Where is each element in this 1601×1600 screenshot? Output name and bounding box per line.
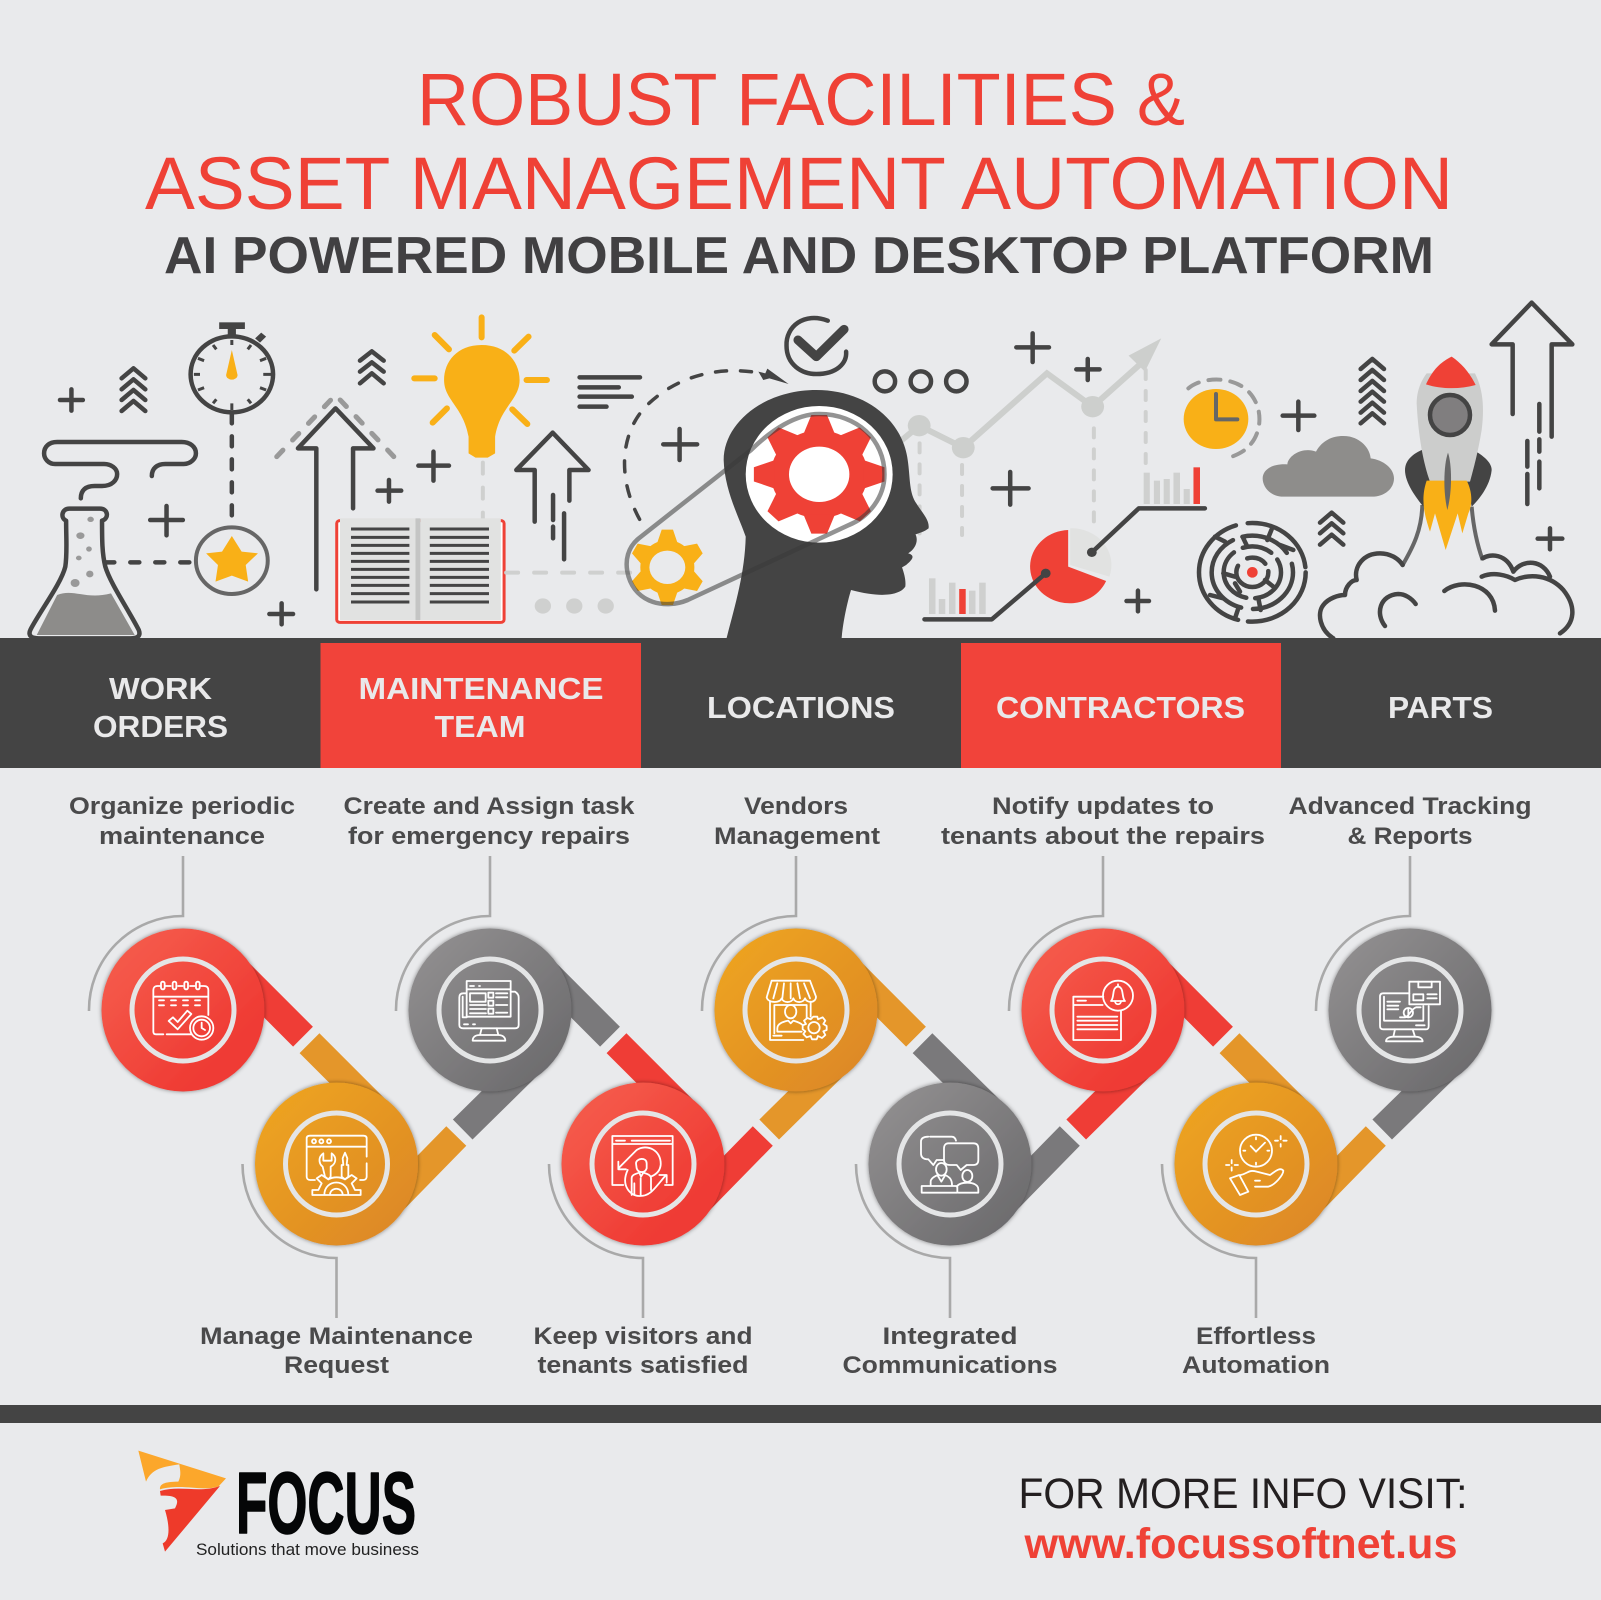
icon: head silhouette (724, 390, 929, 638)
label: manage maintenance request: Request (284, 1352, 389, 1379)
footer divider (0, 1405, 1601, 1423)
band label: work orders (93, 671, 228, 744)
website link: www.focussoftnet.us (1023, 1520, 1458, 1568)
circle: integrated communications (868, 1082, 1032, 1246)
red tab: contractors (961, 643, 1281, 768)
icon: star badge (196, 527, 268, 594)
label: manage maintenance request: Manage Maintenance (200, 1323, 473, 1350)
title (145, 58, 1453, 225)
icon: brain gear (746, 406, 893, 543)
circle: create and assign task (408, 928, 572, 1092)
band label: maintenance team: MAINTENANCE (358, 671, 604, 706)
icon: conversation (921, 1137, 978, 1193)
label: organize periodic maintenance: maintenance (99, 823, 265, 850)
bottom labels (200, 1323, 1330, 1379)
label: advanced tracking: Advanced Tracking (1288, 793, 1532, 820)
band label: locations: LOCATIONS (707, 690, 895, 725)
band label: contractors: CONTRACTORS (996, 690, 1245, 725)
circle: vendors management (714, 928, 878, 1092)
label: integrated communications (842, 1323, 1058, 1379)
band label: parts: PARTS (1388, 690, 1493, 725)
icon: window with tools (307, 1136, 367, 1195)
title: ROBUST FACILITIES & (417, 58, 1185, 141)
label: effortless automation: Automation (1182, 1352, 1330, 1379)
label: manage maintenance request (200, 1323, 473, 1379)
icon: monitor dashboard (459, 981, 519, 1041)
icon: clock (1184, 380, 1259, 459)
top labels (69, 793, 1532, 850)
label: advanced tracking: & Reports (1348, 823, 1472, 850)
icon: rocket (1403, 357, 1492, 565)
icon: plus and chevrons right (1283, 359, 1562, 549)
circle: keep visitors (562, 1082, 724, 1246)
dashed connector: stopwatch to star (230, 413, 234, 520)
icon: cloud (1263, 436, 1394, 497)
chart: right bars (1087, 467, 1205, 557)
band label: work orders: WORK (109, 671, 213, 706)
illustration: centre part (625, 318, 1205, 638)
icon: gear small yellow (630, 530, 705, 605)
chart: pie (1030, 528, 1111, 603)
illustration: right part (1184, 303, 1572, 638)
call to action: FOR MORE INFO VISIT: (1018, 1470, 1468, 1518)
label: integrated communications: Communications (842, 1352, 1058, 1379)
icon: open book (337, 518, 504, 622)
dashed connector: bulb to book (481, 463, 485, 520)
arrow: dashed curve to head (625, 369, 789, 519)
guide arcs (89, 856, 1410, 1318)
label: effortless automation: Effortless (1196, 1323, 1316, 1350)
band label: work orders: ORDERS (93, 709, 228, 744)
band label: maintenance team (358, 671, 604, 744)
red tab: maintenance team (320, 643, 641, 768)
circle: advanced tracking (1328, 928, 1492, 1092)
icon: person with cycle arrows (612, 1136, 673, 1196)
icon: monitor with package (1380, 982, 1440, 1041)
arrow: big up right (1492, 303, 1572, 504)
label: organize periodic maintenance (69, 793, 295, 850)
dashed connector: flask to star (105, 560, 200, 565)
icon: flask with tube (30, 442, 196, 638)
icon: check circle (787, 318, 846, 374)
icons column three four five (612, 981, 978, 1196)
icon: store with vendor (767, 981, 827, 1040)
icon: stopwatch (191, 322, 273, 412)
icon: hand with clock (1226, 1135, 1287, 1195)
label: notify updates: Notify updates to (992, 793, 1214, 820)
subtitle: AI POWERED MOBILE AND DESKTOP PLATFORM (164, 227, 1434, 285)
label: notify updates (941, 793, 1265, 850)
icon: text lines (580, 377, 640, 407)
icons column one and two (153, 981, 519, 1195)
chart: rising trend line (900, 338, 1161, 535)
label: vendors management: Vendors (744, 793, 848, 820)
connector strips (230, 963, 1457, 1211)
label: organize periodic maintenance: Organize periodic (69, 793, 295, 820)
label: create and assign task: Create and Assign task (344, 793, 635, 820)
icon: calendar (153, 982, 213, 1040)
arrow: up small (516, 433, 589, 559)
icon: smoke cloud outline (1320, 553, 1572, 638)
label: keep visitors: tenants satisfied (538, 1352, 748, 1379)
band label: maintenance team: TEAM (434, 709, 526, 744)
arrow: up with dashed chevron (277, 395, 394, 589)
circle: organize periodic maintenance (102, 928, 264, 1092)
logo tagline: Solutions that move business (196, 1540, 419, 1559)
icon: plus signs centre (663, 333, 1149, 611)
belt connecting gears (627, 414, 884, 604)
chart: left bars (924, 569, 1051, 619)
logo (138, 1451, 419, 1559)
label: vendors management: Management (714, 823, 880, 850)
label: create and assign task: for emergency repairs (348, 823, 630, 850)
label: effortless automation (1182, 1323, 1330, 1379)
logo mark (138, 1451, 226, 1552)
label: keep visitors: Keep visitors and (534, 1323, 752, 1350)
logo wordmark: FOCUS (236, 1455, 416, 1552)
icon: three rings (875, 371, 967, 391)
icons column six seven eight (1073, 981, 1440, 1195)
circle: notify updates (1022, 928, 1184, 1092)
dashed line and dots (506, 573, 633, 614)
title: ASSET MANAGEMENT AUTOMATION (145, 142, 1453, 225)
label: keep visitors (534, 1323, 752, 1379)
label: notify updates: tenants about the repairs (941, 823, 1265, 850)
icon: notification window (1073, 981, 1133, 1040)
circle: effortless automation (1174, 1082, 1338, 1246)
icon: plus signs and chevrons left (60, 351, 449, 624)
label: integrated communications: Integrated (882, 1323, 1018, 1350)
circle: manage maintenance request (255, 1082, 418, 1246)
label: advanced tracking (1288, 793, 1532, 850)
navigation band (0, 638, 1601, 768)
illustration: left part (30, 317, 640, 638)
icon: maze (1199, 523, 1306, 622)
label: vendors management (714, 793, 880, 850)
icon: light bulb (414, 317, 547, 458)
label: create and assign task (344, 793, 635, 850)
